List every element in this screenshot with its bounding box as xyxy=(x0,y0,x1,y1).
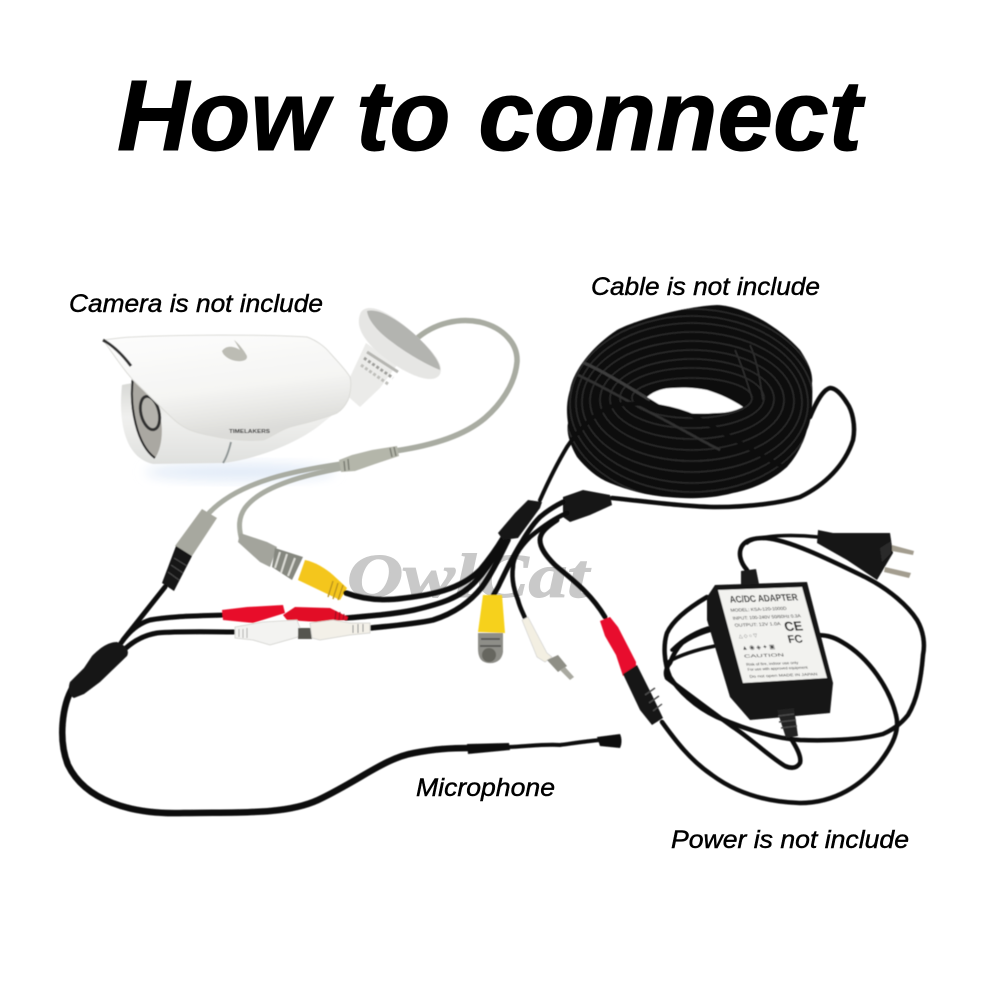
camera cable connector xyxy=(339,446,399,472)
black AV cables xyxy=(121,538,508,648)
camera xyxy=(103,308,441,464)
adapter label: CE xyxy=(782,619,805,634)
adapter label: INPUT: 100-240V 50/60Hz 0.3A xyxy=(732,613,801,621)
red power socket xyxy=(540,520,663,725)
lens front xyxy=(132,375,163,458)
cable tails over coil xyxy=(540,388,854,507)
microphone tip xyxy=(597,734,622,748)
adapter label xyxy=(718,587,827,683)
microphone cable xyxy=(62,687,622,813)
adapter label: ▲ ◉ ◈ ✦ ▣ xyxy=(741,644,776,652)
plug prongs xyxy=(892,545,914,555)
adapter label: △ ◇ ○ ▽ xyxy=(738,633,758,640)
title: How to connect xyxy=(117,60,866,172)
watermark: OwlCat xyxy=(347,543,591,611)
adapter label: FC xyxy=(786,634,804,646)
cable coil xyxy=(564,305,820,501)
visor xyxy=(103,335,351,440)
adapter label: MODEL: KSA-120-1000D xyxy=(730,606,788,613)
label: microphone: Microphone xyxy=(416,774,555,802)
white audio connectors xyxy=(235,620,370,645)
camera shadow xyxy=(145,463,335,481)
grey camera cables xyxy=(209,321,517,537)
adapter label: For use with approved equipment xyxy=(747,666,808,672)
yellow video socket xyxy=(478,502,563,663)
mount disc and arm xyxy=(343,308,441,407)
visor logo xyxy=(222,340,247,361)
camera body xyxy=(121,370,345,464)
brand text: TIMELAKERS xyxy=(229,429,270,435)
adapter label: CAUTION xyxy=(743,652,785,659)
power cables xyxy=(662,536,924,803)
white RCA socket xyxy=(512,513,574,680)
power plug xyxy=(817,530,914,580)
bottom strain relief xyxy=(777,708,798,738)
power plug grey connector xyxy=(162,509,217,591)
power adapter xyxy=(707,569,833,738)
red audio connectors xyxy=(222,605,348,623)
adapter label: AC/DC ADAPTER xyxy=(728,592,799,606)
label: cable: Cable is not include xyxy=(591,273,820,301)
coil centre hole xyxy=(647,388,743,414)
label: power: Power is not include xyxy=(671,826,909,854)
photo group xyxy=(62,305,924,813)
adapter label: Risk of fire, indoor use only xyxy=(746,661,799,667)
adapter label: Do not open MADE IN JAPAN xyxy=(749,672,819,679)
top strain relief xyxy=(741,569,759,585)
splitter left xyxy=(69,642,128,698)
adapter label: OUTPUT: 12V 1.0A xyxy=(734,621,781,628)
middle splitters xyxy=(498,490,612,540)
label: camera: Camera is not include xyxy=(69,290,323,318)
connection diagram xyxy=(58,80,927,848)
BNC video plug xyxy=(238,533,347,600)
